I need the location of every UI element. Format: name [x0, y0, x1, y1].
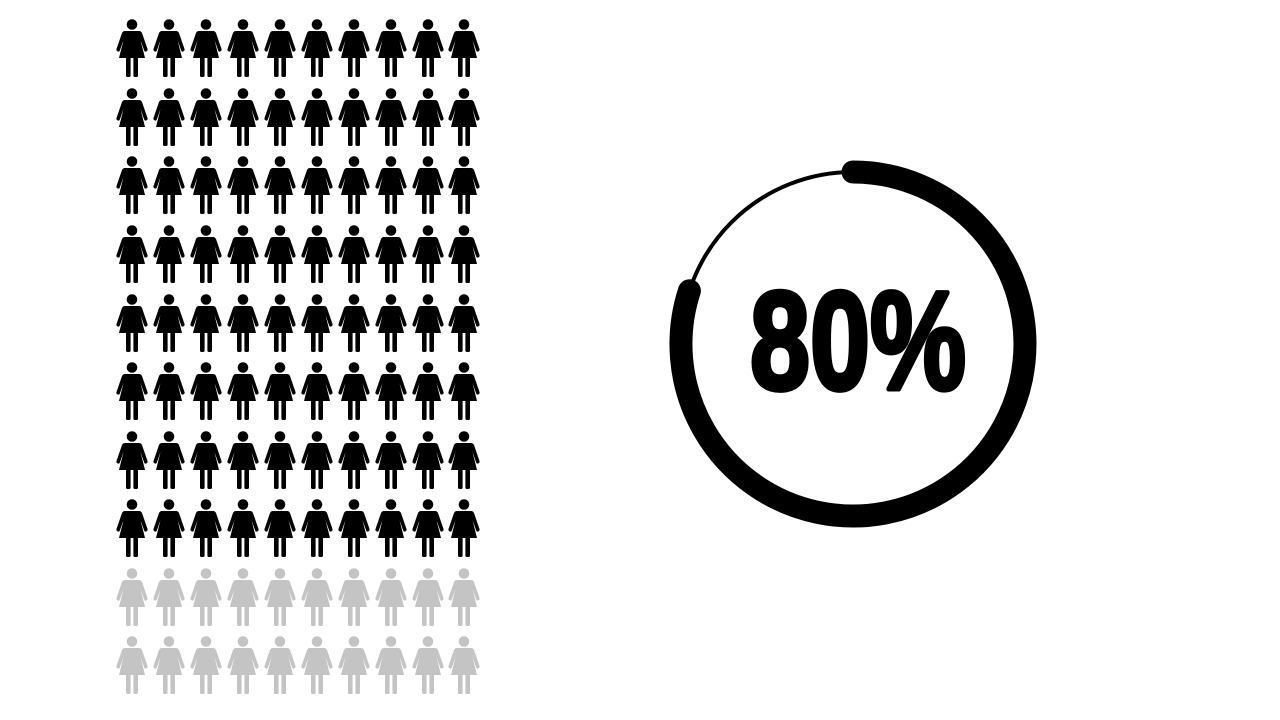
pictogram grid: 100 women, 80 filled: [116, 19, 480, 694]
percentage label: 80%: [750, 262, 966, 419]
filled figures (80): [116, 19, 480, 557]
thick arc (80%): [681, 172, 1025, 516]
grey figures (20): [116, 568, 480, 694]
thin track (remaining 20%): [681, 172, 1025, 516]
progress ring 80%: [681, 172, 1025, 516]
